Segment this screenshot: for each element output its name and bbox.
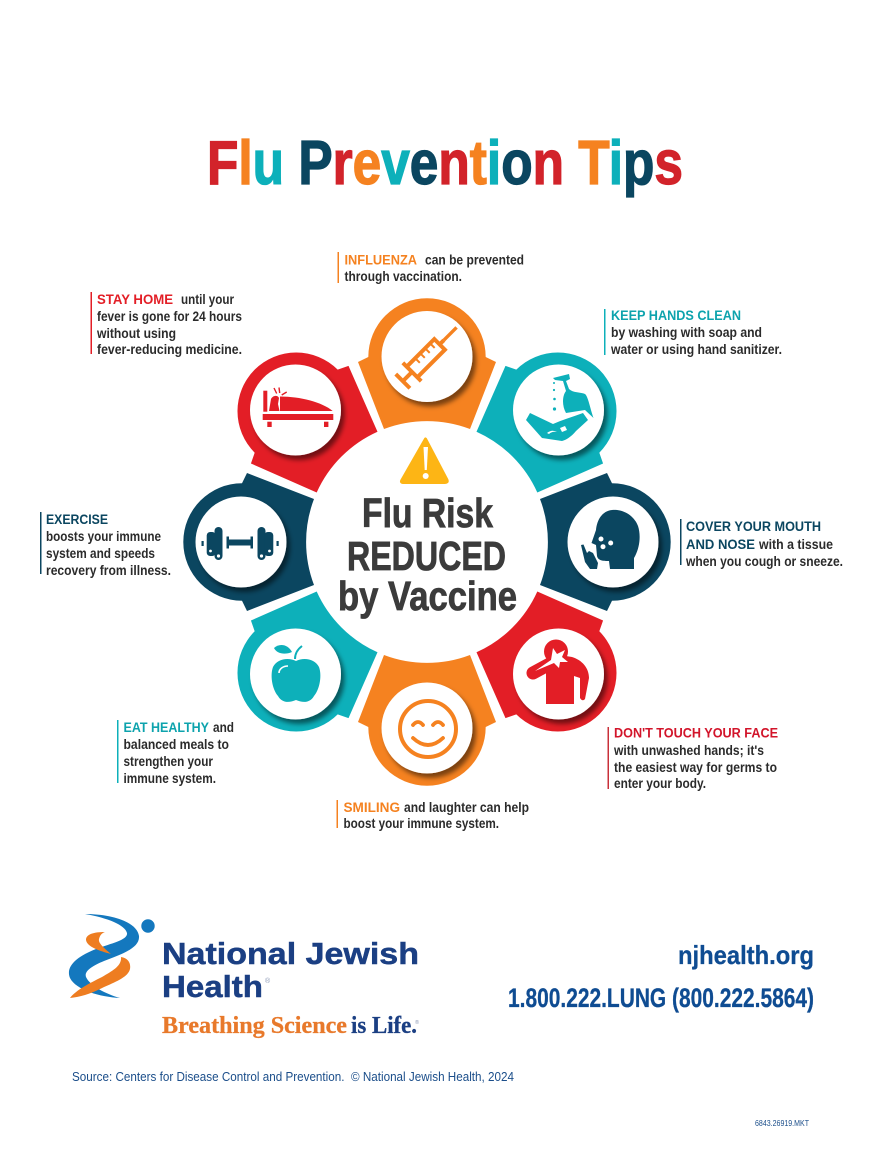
tip: exercise: recovery from illness. <box>46 563 171 578</box>
tip: keep hands clean: KEEP HANDS CLEAN <box>611 308 741 324</box>
tip: stay home: STAY HOME <box>97 292 173 308</box>
tip: don't touch your face: the easiest way for germs to <box>614 760 777 775</box>
tip: influenza <box>338 252 524 284</box>
segment: teal upper right <box>458 321 648 511</box>
tip: smiling: and laughter can help <box>404 800 529 815</box>
source line: Source: Centers for Disease Control and Prevention. © National Jewish Health, 2024 <box>72 1069 514 1084</box>
tip: keep hands clean <box>604 308 782 357</box>
ring of eight coloured segments <box>183 298 671 786</box>
tip: exercise: boosts your immune <box>46 529 161 544</box>
tip: don't touch your face <box>608 726 778 791</box>
logo wordmark: Breathing Science <box>162 1013 347 1039</box>
tip: exercise: system and speeds <box>46 546 155 561</box>
logo wordmark: Health <box>162 970 263 1004</box>
segment: navy left <box>183 473 314 611</box>
contact details: njhealth.org <box>678 940 814 970</box>
contact details <box>508 940 814 1013</box>
center message <box>338 490 517 619</box>
icon: syringe <box>394 318 466 390</box>
icon: person in bed <box>263 388 333 427</box>
tip: stay home: without using <box>96 326 176 341</box>
tip: keep hands clean: by washing with soap and <box>611 325 762 340</box>
segment: orange top <box>358 298 496 429</box>
tip: stay home: fever-reducing medicine. <box>97 342 242 357</box>
logo wordmark: ® <box>265 977 271 985</box>
logo wordmark: is Life. <box>351 1013 417 1039</box>
segment: orange bottom <box>358 655 496 786</box>
title: Flu Prevention Tips <box>207 129 683 198</box>
tip: influenza: through vaccination. <box>344 269 462 284</box>
tip: exercise <box>40 512 171 578</box>
tip: eat healthy: and <box>213 720 234 735</box>
center message: REDUCED <box>347 533 506 579</box>
icon: dumbbell <box>202 527 279 560</box>
tip: don't touch your face: enter your body. <box>614 776 706 791</box>
center message: Flu Risk <box>362 490 493 536</box>
icon: apple <box>272 645 320 702</box>
tip: eat healthy: balanced meals to <box>124 737 229 752</box>
tip: smiling: SMILING <box>344 800 400 816</box>
tip: cover your mouth: AND NOSE <box>686 537 755 553</box>
white icon discs <box>196 311 658 774</box>
logo wordmark: ® <box>415 1019 419 1026</box>
tip: eat healthy: strengthen your <box>124 754 214 769</box>
tip: smiling: boost your immune system. <box>344 816 499 831</box>
icon: yellow warning triangle <box>401 439 447 482</box>
icon: soap and hands <box>526 374 594 441</box>
icon: head coughing behind hand <box>581 510 640 569</box>
tip: stay home: until your <box>181 292 235 307</box>
tip: exercise: EXERCISE <box>46 512 108 528</box>
segment: red lower right <box>458 573 648 763</box>
icon: smiley face <box>400 701 456 757</box>
tip: eat healthy: EAT HEALTHY <box>124 720 209 736</box>
tip: don't touch your face: with unwashed hands; it's <box>613 743 764 758</box>
logo mark: helix <box>69 914 155 998</box>
tip: smiling <box>336 800 529 831</box>
center message: by Vaccine <box>338 573 517 619</box>
segment: teal lower left <box>206 573 396 763</box>
segment: red upper left <box>206 321 396 511</box>
tip: eat healthy: immune system. <box>124 771 216 786</box>
tip: cover your mouth: COVER YOUR MOUTH <box>686 519 821 535</box>
tip: influenza: can be prevented <box>425 252 524 268</box>
document code: 6843.26919.MKT <box>755 1118 809 1128</box>
tip: influenza: INFLUENZA <box>344 252 417 268</box>
segment: navy right <box>540 473 671 611</box>
tip: cover your mouth: when you cough or sneeze. <box>685 554 843 569</box>
tip: stay home: fever is gone for 24 hours <box>97 309 242 324</box>
tip: eat healthy <box>117 720 234 786</box>
tip: cover your mouth: with a tissue <box>758 537 833 552</box>
tip: stay home <box>90 292 242 357</box>
tip: don't touch your face: DON'T TOUCH YOUR FACE <box>614 726 778 742</box>
tip: keep hands clean: water or using hand sanitizer. <box>610 342 782 357</box>
icon: person touching face <box>533 640 589 704</box>
logo wordmark: National Jewish <box>162 937 419 971</box>
tip: cover your mouth <box>680 519 843 569</box>
logo wordmark <box>162 937 419 1039</box>
